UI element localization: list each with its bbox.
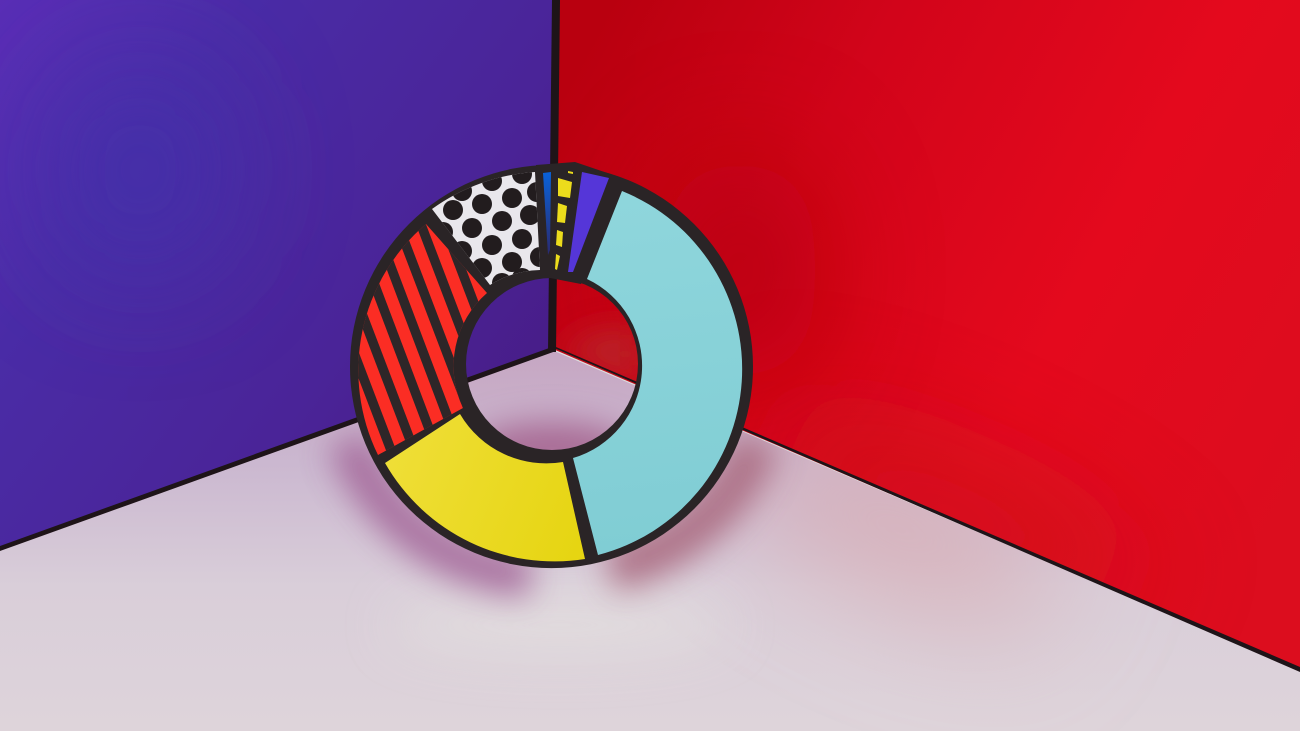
floor warm reflection from red wall	[756, 452, 1060, 647]
donut dark frame	[350, 165, 753, 568]
segment: blue sliver	[543, 172, 551, 255]
donut shadow right	[610, 440, 758, 568]
panel: purple wall	[0, 0, 556, 552]
floor pale highlight	[460, 602, 676, 639]
segment: red stripes	[358, 224, 487, 455]
donut shadow left	[348, 440, 530, 576]
segment: teal	[573, 191, 742, 555]
segment: white with black dots	[432, 172, 540, 285]
segment: dashed yellow sliver	[555, 171, 573, 270]
segment: violet sliver	[568, 172, 609, 272]
donut chart	[350, 162, 753, 568]
shadow inside the hole	[484, 404, 620, 450]
panel: pale floor	[0, 350, 1300, 731]
raised top pieces	[536, 162, 622, 284]
segment: yellow	[385, 414, 585, 561]
panel: red wall	[553, 0, 1300, 672]
